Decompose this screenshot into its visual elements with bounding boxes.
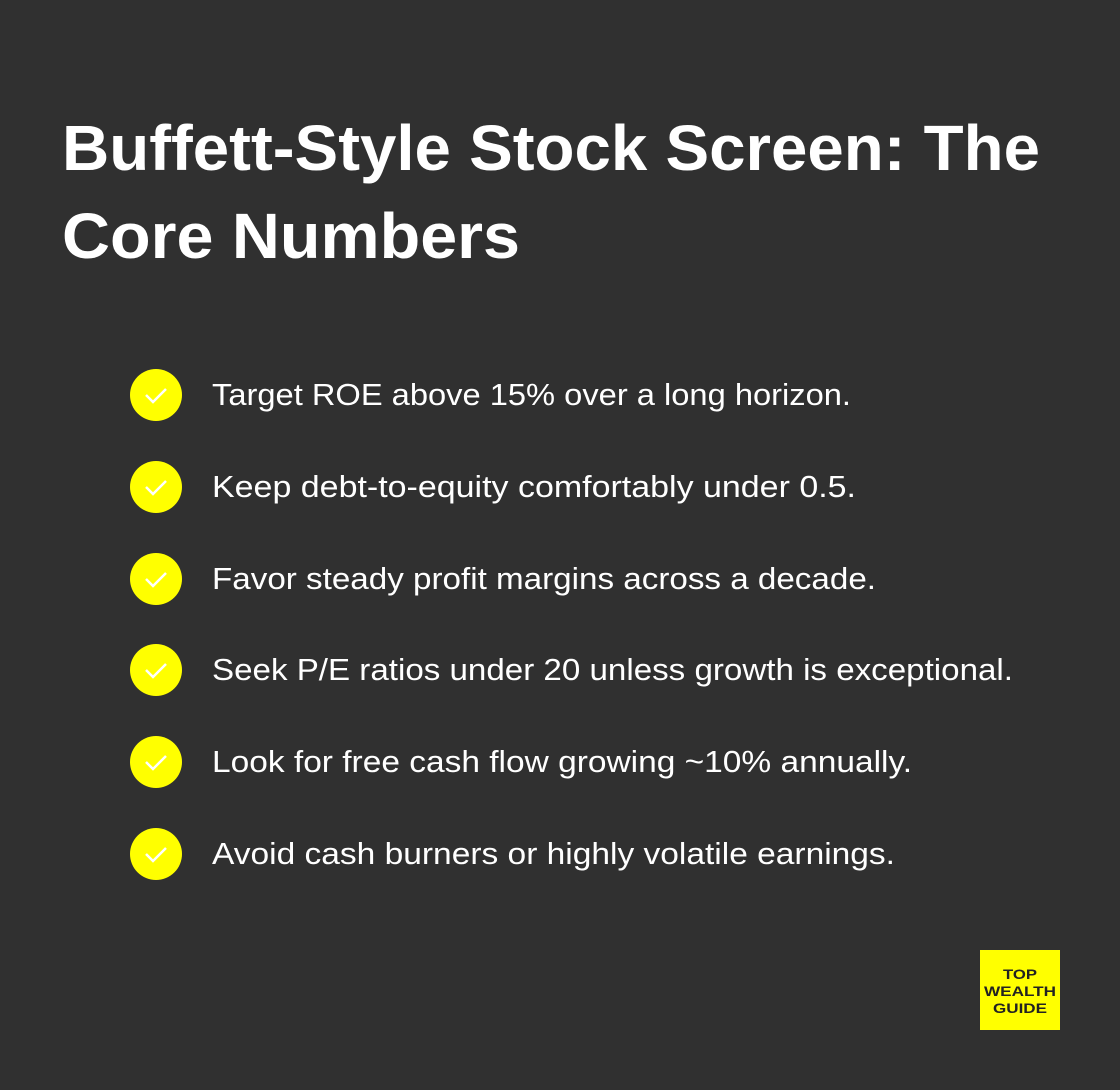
checklist <box>130 369 1013 880</box>
logo: WEALTH <box>984 983 1056 999</box>
logo: GUIDE <box>993 1000 1047 1016</box>
item 4: Seek P/E ratios under 20 unless growth is exceptional. <box>212 652 1013 687</box>
title <box>62 112 1040 272</box>
item 1 <box>130 369 851 421</box>
title: Core Numbers <box>62 200 520 272</box>
item 6 <box>130 828 895 880</box>
item 3: Favor steady profit margins across a decade. <box>212 561 876 596</box>
item 1: Target ROE above 15% over a long horizon. <box>212 377 851 412</box>
item 5 <box>130 736 912 788</box>
item 4 <box>130 644 1013 696</box>
item 5: Look for free cash flow growing ~10% annually. <box>212 744 912 779</box>
logo <box>980 950 1060 1030</box>
item 6: Avoid cash burners or highly volatile earnings. <box>212 836 895 871</box>
logo: TOP <box>1003 966 1037 982</box>
item 2 <box>130 461 856 513</box>
item 3 <box>130 553 876 605</box>
title: Buffett-Style Stock Screen: The <box>62 112 1040 184</box>
item 2: Keep debt-to-equity comfortably under 0.5. <box>212 469 856 504</box>
